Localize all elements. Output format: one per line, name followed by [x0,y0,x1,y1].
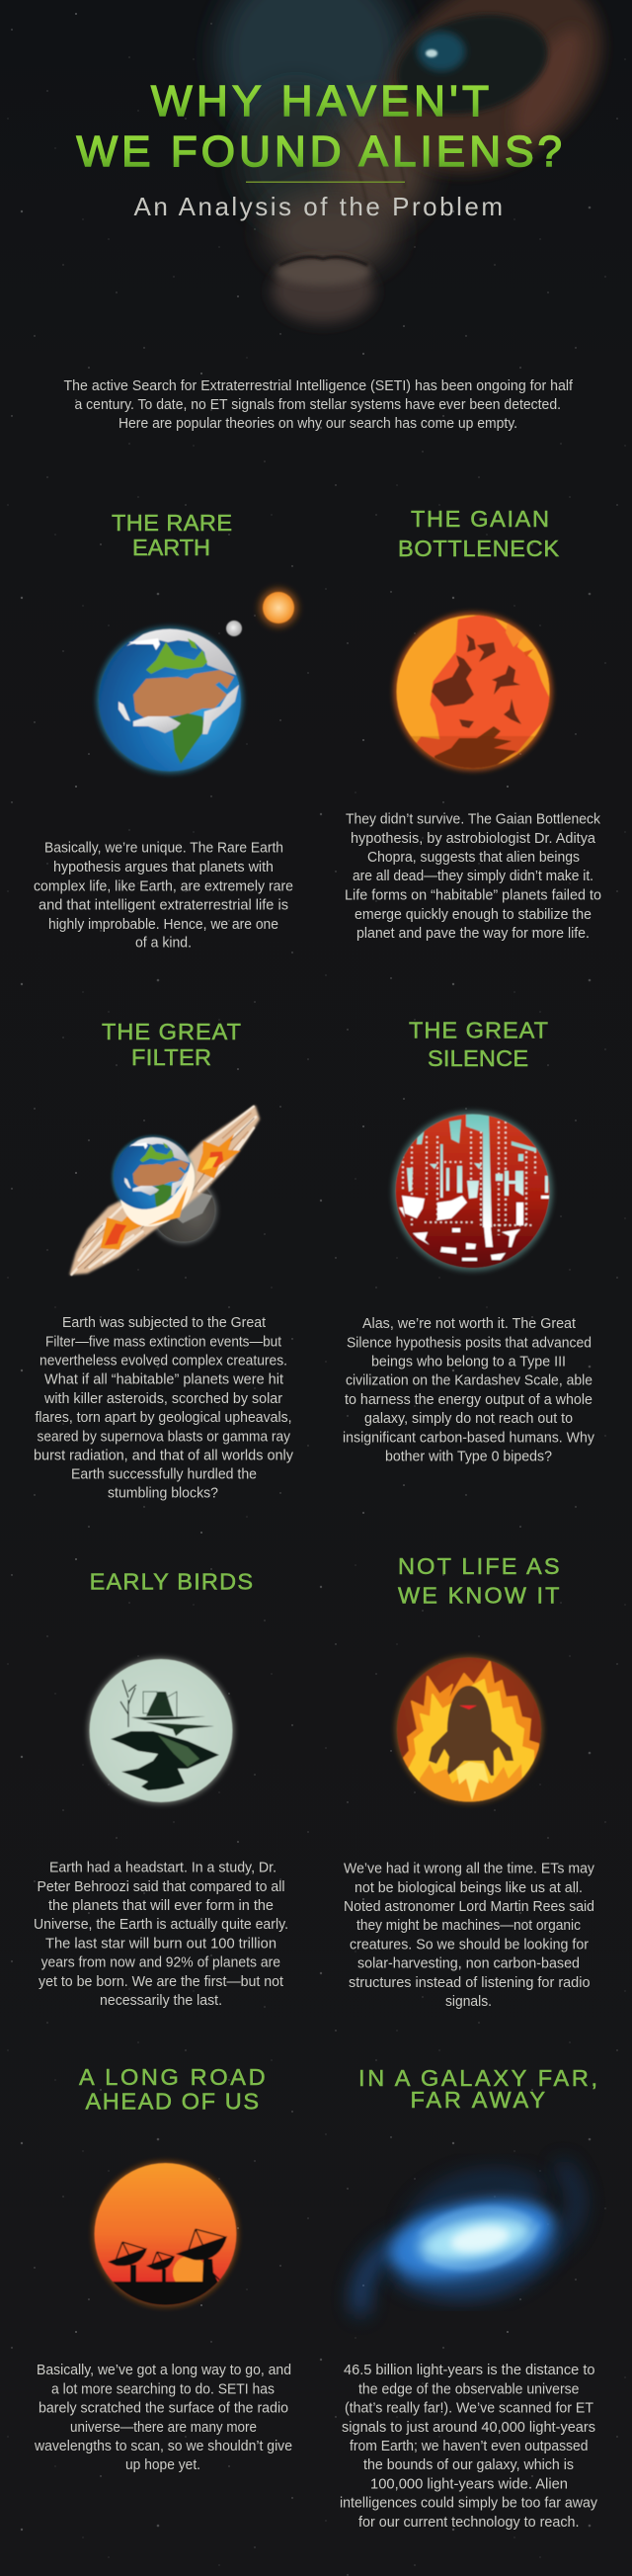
intro text: The active Search for Extraterrestrial Intelligence (SETI) has been ongoing for half [63,377,574,394]
text: a long road: Basically, we’ve got a long way to go, and [37,2362,291,2378]
heading: the great filter [102,1019,241,1070]
heading: not life as we know it [398,1553,559,1609]
icon: pale moon with fisherman [88,1658,234,1804]
text: great filter: Filter—five mass extinction events—but [45,1333,282,1350]
text: in a galaxy far: intelligences could simply be too far away [340,2495,597,2512]
text: gaian bottleneck: planet and pave the way for more life. [356,925,590,942]
text: rare earth: of a kind. [135,935,192,951]
heading: early birds: EARLY BIRDS [90,1569,253,1595]
intro text [63,377,574,432]
text: in a galaxy far: the edge of the observable universe [358,2381,579,2397]
text: in a galaxy far: 46.5 billion light-years is the distance to [344,2362,594,2378]
title divider [246,182,405,183]
text: early birds: yet to be born. We are the first—but not [39,1973,284,1990]
heading: in a galaxy far, far away [358,2065,597,2113]
text: early birds: years from now and 92% of planets are [41,1954,280,1971]
text: gaian bottleneck: Life forms on “habitable” planets failed to [345,887,601,903]
text: gaian bottleneck: emerge quickly enough to stabilize the [355,906,592,923]
icon: spiral galaxy [360,2168,577,2307]
heading: the gaian bottleneck [398,506,559,561]
text: in a galaxy far: for our current technology to reach. [358,2514,579,2531]
icon: earth with moon and sun [97,589,297,773]
text: rare earth: complex life, like Earth, are extremely rare [34,877,293,895]
panel: a long road ahead of us [34,2064,292,2473]
icon: colliding planets [49,1106,282,1286]
text: great silence [343,1315,594,1464]
text: rare earth [34,840,293,951]
heading: the rare earth: EARTH [132,535,210,560]
heading: the great filter: THE GREAT [102,1019,241,1044]
text: gaian bottleneck: Chopra, suggests that alien beings [367,849,580,866]
text: in a galaxy far: the bounds of our galaxy, which is [363,2456,574,2473]
heading: the rare earth [112,510,232,560]
text: not life as we know it: solar-harvesting, non carbon-based [357,1955,580,1972]
text: not life as we know it: they might be machines—not organic [356,1917,581,1934]
panel: the great filter [34,1019,293,1502]
text: great silence: galaxy, simply do not reach out to [364,1410,573,1427]
text: great silence: Silence hypothesis posits that advanced [347,1334,592,1351]
text: great silence: beings who belong to a Type III [371,1354,566,1371]
text: rare earth: and that intelligent extraterrestrial life is [39,897,288,913]
heading: in a galaxy far, far away: FAR AWAY [411,2087,545,2113]
text: in a galaxy far: (that’s really far!). We’ve scanned for ET [345,2400,593,2417]
panel: the great silence [343,1018,594,1464]
alien face illustration [217,0,632,323]
panel: the gaian bottleneck [345,506,601,942]
text: great filter: flares, torn apart by geological upheavals, [36,1409,292,1426]
text: great silence: bother with Type 0 bipeds? [385,1449,552,1464]
text: great filter: with killer asteroids, scorched by solar [43,1390,282,1407]
heading: a long road ahead of us: AHEAD OF US [85,2089,259,2115]
text: not life as we know it: signals. [445,1993,492,2010]
text: a long road [34,2362,292,2473]
text: great filter [34,1314,293,1502]
text: in a galaxy far: from Earth; we haven’t even outpassed [350,2438,589,2454]
heading: the rare earth: THE RARE [112,510,232,536]
text: early birds: Universe, the Earth is actually quite early. [34,1916,288,1933]
text: great filter: What if all “habitable” planets were hit [44,1371,284,1388]
text: gaian bottleneck: They didn’t survive. The Gaian Bottleneck [346,810,600,828]
icon: robot in flames [395,1656,543,1808]
text: in a galaxy far: signals to just around 40,000 light-years [342,2419,595,2436]
heading: a long road ahead of us: A LONG ROAD [79,2064,266,2090]
text: not life as we know it: structures instead of listening for radio [349,1974,591,1991]
panel: early birds [34,1569,288,2009]
panel: the rare earth [34,510,297,951]
icon: radio dishes at sunset [89,2161,247,2311]
panel: in a galaxy far, far away [340,2065,597,2531]
heading: the great silence: SILENCE [428,1045,528,1071]
text: great silence: insignificant carbon-based humans. Why [343,1429,594,1447]
heading: the gaian bottleneck: THE GAIAN [411,506,549,532]
intro text: a century. To date, no ET signals from stellar systems have ever been detected. [75,396,561,413]
text: gaian bottleneck: are all dead—they simply didn’t make it. [353,868,593,884]
text: great silence: civilization on the Kardashev Scale, able [346,1372,592,1389]
text: a long road: up hope yet. [125,2456,200,2473]
text: gaian bottleneck: hypothesis, by astrobiologist Dr. Aditya [351,830,596,847]
text: great filter: seared by supernova blasts or gamma ray [38,1429,290,1445]
heading: not life as we know it: WE KNOW IT [398,1583,559,1609]
text: gaian bottleneck [345,810,601,942]
icon: red city planet [393,1111,553,1271]
text: in a galaxy far: 100,000 light-years wide. Alien [370,2476,568,2492]
title [77,77,562,176]
heading: a long road ahead of us [79,2064,266,2115]
panel: not life as we know it [344,1553,594,2010]
text: a long road: barely scratched the surface of the radio [39,2400,288,2417]
subtitle: An Analysis of the Problem [134,192,503,221]
text: early birds [34,1860,288,2009]
text: a long road: wavelengths to scan, so we shouldn’t give [34,2438,292,2454]
text: rare earth: hypothesis argues that planets with [53,859,274,875]
text: rare earth: Basically, we’re unique. The Rare Earth [44,840,283,856]
text: great filter: Earth successfully hurdled the [71,1466,257,1483]
text: great filter: stumbling blocks? [108,1485,218,1502]
heading: in a galaxy far, far away: IN A GALAXY FAR, [358,2065,597,2091]
intro text: Here are popular theories on why our search has come up empty. [118,415,517,432]
text: great filter: nevertheless evolved complex creatures. [40,1353,287,1370]
text: not life as we know it: creatures. So we should be looking for [350,1936,589,1953]
text: great filter: Earth was subjected to the Great [62,1314,267,1331]
text: a long road: universe—there are many more [70,2419,257,2436]
text: not life as we know it: not be biological beings like us at all. [355,1879,583,1896]
icon: burning planet [394,613,553,776]
text: rare earth: highly improbable. Hence, we are one [48,916,278,933]
text: not life as we know it: We’ve had it wrong all the time. ETs may [344,1860,594,1877]
text: early birds: the planets that will ever form in the [48,1897,274,1914]
title: WE FOUND ALIENS? [77,127,562,176]
heading: the great filter: FILTER [131,1044,211,1070]
text: a long road: a lot more searching to do. SETI has [51,2381,275,2397]
heading: the great silence: THE GREAT [409,1018,548,1043]
text: early birds: necessarily the last. [100,1992,222,2009]
text: great filter: burst radiation, and that of all worlds only [34,1447,293,1463]
text: great silence: Alas, we’re not worth it. The Great [362,1315,577,1332]
text: early birds: The last star will burn out 100 trillion [45,1935,276,1952]
title: WHY HAVEN'T [151,77,489,125]
text: not life as we know it: Noted astronomer Lord Martin Rees said [344,1898,594,1915]
text: early birds: Peter Behroozi said that compared to all [38,1878,284,1895]
heading: not life as we know it: NOT LIFE AS [398,1553,559,1579]
heading: the gaian bottleneck: BOTTLENECK [398,536,559,561]
text: early birds: Earth had a headstart. In a study, Dr. [49,1860,276,1875]
heading: the great silence [409,1018,548,1071]
text: not life as we know it [344,1860,594,2010]
text: great silence: to harness the energy output of a whole [345,1391,592,1408]
text: in a galaxy far [340,2362,597,2531]
